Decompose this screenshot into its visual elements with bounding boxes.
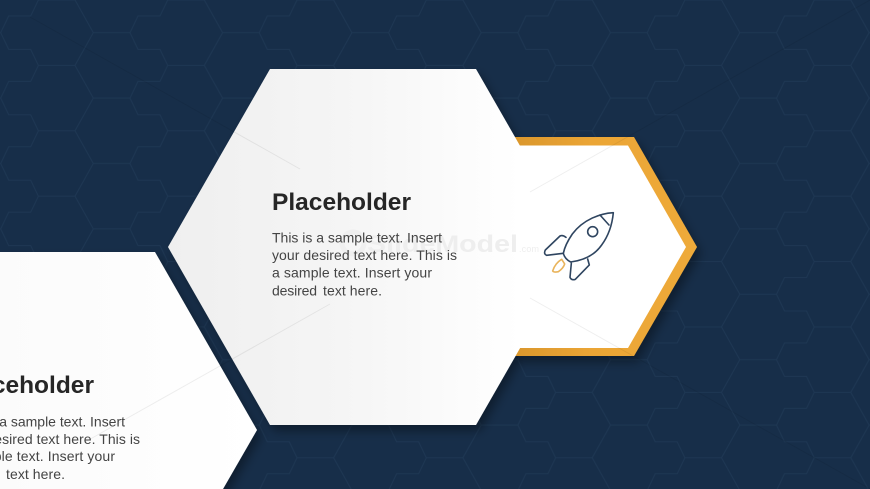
text block: lower left hexagon <box>0 414 140 482</box>
text block: lower left hexagon: text here. <box>6 466 65 482</box>
text block: main hexagon: your desired text here. This is <box>272 247 457 263</box>
icon: rocket <box>545 213 613 280</box>
arrow: white interior <box>505 146 686 348</box>
text block: main hexagon: text here. <box>323 282 382 298</box>
arrow: gold outline <box>505 137 697 356</box>
panel: lower left hexagon <box>0 252 257 489</box>
heading: main hexagon: Placeholder <box>272 189 411 216</box>
text block: main hexagon: a sample text. Insert your <box>272 264 432 280</box>
watermark logo and text <box>342 231 539 258</box>
text block: main hexagon <box>272 230 457 298</box>
main hexagon shape <box>168 69 578 425</box>
watermark logo and text: SlideModel <box>367 231 518 258</box>
text block: main hexagon: desired <box>272 282 317 298</box>
watermark logo and text: .com <box>519 244 539 254</box>
panel: main hexagon with gold arrow <box>168 69 697 425</box>
text block: main hexagon: This is a sample text. Insert <box>272 230 442 246</box>
